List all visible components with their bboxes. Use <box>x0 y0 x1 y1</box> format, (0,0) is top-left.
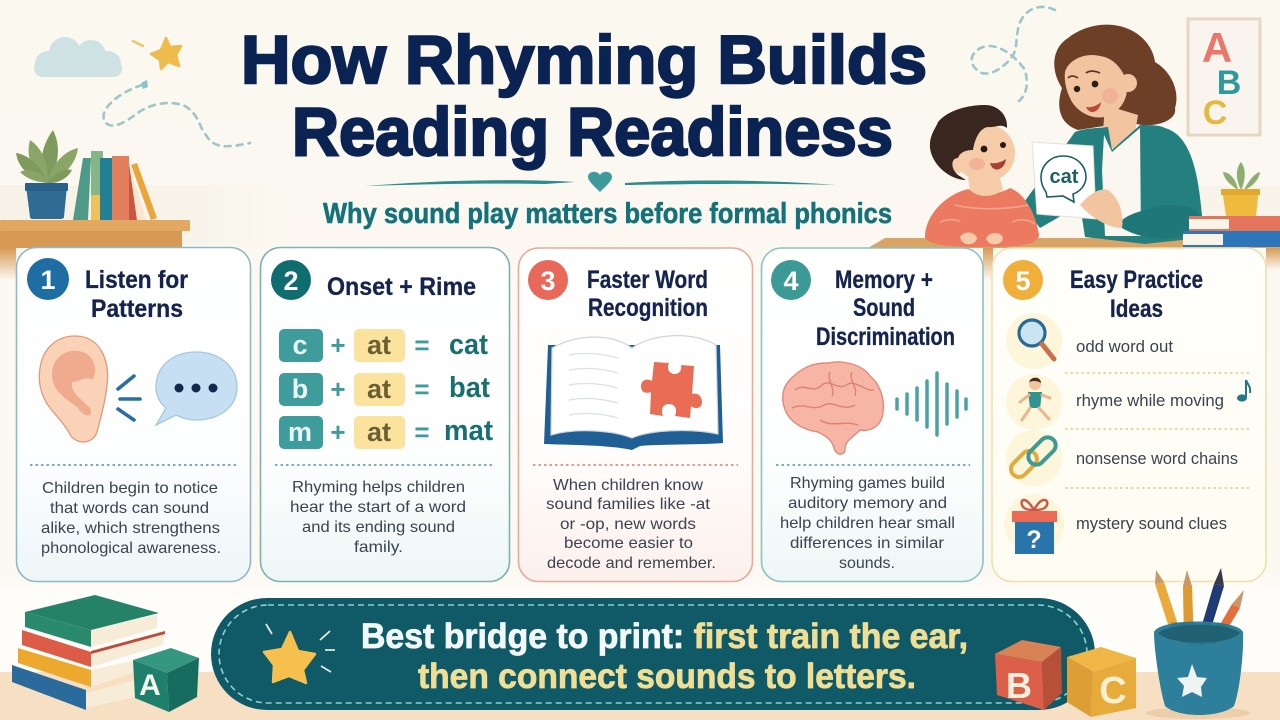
heading: Recognition <box>588 294 708 322</box>
dashed flight path right <box>972 7 1055 101</box>
panel: 5 easy practice ideas <box>992 248 1266 582</box>
teacher <box>1022 25 1202 244</box>
description: Children begin to notice <box>42 480 218 497</box>
face <box>1065 55 1137 118</box>
equation: b + at = bat: bat <box>449 372 490 404</box>
heading: Easy Practice <box>1070 266 1203 294</box>
panel: 4 memory + sound discrimination <box>762 248 983 582</box>
heading <box>1070 266 1203 323</box>
item: rhyme while moving <box>1006 374 1250 430</box>
redraw of pencil bases in cup <box>1170 622 1228 645</box>
teacher hand <box>1080 189 1122 228</box>
heading: Patterns <box>91 295 183 323</box>
equation: b + at = bat: + <box>330 374 346 404</box>
arm <box>1121 205 1201 238</box>
banner message: then connect sounds to letters. <box>418 657 916 696</box>
heading: Listen for <box>85 266 188 294</box>
equation: c + at = cat: c <box>292 330 308 360</box>
icon: ear <box>39 336 108 442</box>
pencil red <box>1208 590 1244 645</box>
letter block B: B <box>1006 665 1032 706</box>
cup star <box>1177 664 1207 697</box>
item: nonsense word chains <box>1006 430 1238 486</box>
letter block C <box>1067 647 1136 717</box>
plant <box>16 130 78 219</box>
description: and its ending sound <box>302 519 455 536</box>
plant and books on table <box>1183 162 1280 247</box>
number badge 2: 2 <box>283 266 299 296</box>
description: When children know <box>553 477 703 494</box>
description: become easier to <box>564 535 693 552</box>
banner <box>211 598 1095 710</box>
ABC wall poster: A <box>1202 24 1232 71</box>
equation: b + at = bat: at <box>367 374 391 404</box>
equation: b + at = bat: b <box>292 374 308 404</box>
description: that words can sound <box>50 500 209 517</box>
boy hands <box>960 233 1003 244</box>
heading: Sound <box>853 294 915 322</box>
item: mystery sound clues: mystery sound clues <box>1076 514 1227 533</box>
number badge 3: 3 <box>540 266 556 296</box>
banner message: Best bridge to print: first train the ear, <box>361 617 968 656</box>
boy hair <box>930 105 1007 180</box>
equation: c + at = cat: at <box>367 330 391 360</box>
letter block A <box>133 648 199 712</box>
icon: speech bubble <box>156 352 237 425</box>
heading <box>85 266 188 323</box>
item: nonsense word chains: nonsense word chains <box>1076 449 1238 468</box>
number badge 4 <box>771 260 811 300</box>
equation: m + at = mat: + <box>330 417 346 447</box>
equation: m + at = mat: mat <box>444 415 493 447</box>
table <box>868 238 1280 280</box>
cardigan <box>1022 125 1202 244</box>
description: help children hear small <box>780 515 955 532</box>
pencil navy <box>1196 568 1224 645</box>
equation: m + at = mat <box>279 415 493 449</box>
item: odd word out <box>1006 313 1173 369</box>
coral book <box>1189 216 1280 231</box>
title: How Rhyming Builds <box>241 22 927 98</box>
item: rhyme while moving: rhyme while moving <box>1076 391 1224 410</box>
books upright <box>73 151 157 220</box>
ABC wall poster: C <box>1203 94 1227 132</box>
heading: Onset + Rime <box>327 273 476 301</box>
neck and head <box>950 124 1015 196</box>
description: hear the start of a word <box>290 499 466 516</box>
item: odd word out: odd word out <box>1076 337 1173 356</box>
item: mystery sound clues: ? <box>1026 526 1042 554</box>
title: Reading Readiness <box>292 94 893 170</box>
description: decode and remember. <box>547 555 716 572</box>
number badge 3 <box>528 260 568 300</box>
icon: music note <box>1237 380 1250 402</box>
icon: puzzle piece <box>641 362 702 418</box>
divider with heart <box>365 172 836 192</box>
cup body <box>1146 622 1250 719</box>
icon: sound wave <box>897 373 966 435</box>
heading <box>587 266 708 322</box>
description: sound families like -at <box>546 496 711 513</box>
description: differences in similar <box>790 535 945 552</box>
banner message <box>361 617 968 696</box>
equation: m + at = mat: at <box>367 417 391 447</box>
flash card cat <box>1032 142 1122 228</box>
title <box>241 22 927 170</box>
shelf <box>0 220 190 280</box>
equation: m + at = mat: = <box>414 417 430 447</box>
hair <box>1054 25 1176 130</box>
equation: b + at = bat: = <box>414 374 430 404</box>
blue book <box>12 665 135 710</box>
number badge 5: 5 <box>1015 266 1031 296</box>
subtitle: Why sound play matters before formal phonics <box>323 198 892 230</box>
shirt <box>1102 128 1141 236</box>
panel: 1 listen for patterns <box>16 248 250 582</box>
blue book <box>1183 231 1280 247</box>
number badge 1 <box>27 258 69 300</box>
panel: 3 faster word recognition <box>518 248 752 582</box>
ABC wall poster: B <box>1217 64 1241 102</box>
yellow book <box>18 648 135 687</box>
equation: c + at = cat <box>279 329 488 362</box>
description <box>41 480 221 557</box>
description: auditory memory and <box>788 495 947 512</box>
description: alike, which strengthens <box>41 520 220 537</box>
pencil cup <box>1146 568 1250 719</box>
green book <box>25 595 159 647</box>
icon: star with rays <box>264 624 335 683</box>
panel: 2 onset + rime <box>260 248 510 582</box>
description <box>290 479 466 556</box>
number badge 5 <box>1003 260 1043 300</box>
description: sounds. <box>839 555 895 572</box>
equation: c + at = cat: + <box>330 330 346 360</box>
star and spark <box>133 38 181 69</box>
neck <box>1103 105 1138 152</box>
equation: m + at = mat: m <box>288 417 312 447</box>
number badge 4: 4 <box>783 266 799 296</box>
item: mystery sound clues <box>1004 494 1227 554</box>
number badge 2 <box>271 260 311 300</box>
heading: Ideas <box>1110 295 1163 323</box>
letter block A: A <box>139 669 161 702</box>
red book <box>22 630 165 667</box>
shelf with plant and books <box>0 130 190 280</box>
pencil yellow <box>1155 570 1184 643</box>
dashed flight path left <box>103 80 250 146</box>
description: phonological awareness. <box>41 540 221 557</box>
ABC wall poster <box>1188 19 1260 135</box>
pencil orange <box>1183 570 1194 645</box>
letter block C: C <box>1099 670 1127 712</box>
number badge 1: 1 <box>40 265 56 295</box>
sweater <box>925 188 1039 247</box>
equation: c + at = cat: = <box>414 330 430 360</box>
boy <box>925 105 1039 247</box>
letter block B <box>995 640 1062 710</box>
heading: Discrimination <box>816 323 955 351</box>
heading: Faster Word <box>587 266 708 294</box>
stack of books bottom left <box>12 595 165 710</box>
description: Rhyming games build <box>790 475 945 492</box>
cloud <box>34 37 122 77</box>
equation: c + at = cat: cat <box>449 329 488 361</box>
icon: sound lines <box>118 376 140 420</box>
icon: brain <box>783 362 883 454</box>
description: Rhyming helps children <box>292 479 465 496</box>
description <box>546 477 716 572</box>
heading: Memory + <box>835 266 933 294</box>
description <box>780 475 955 572</box>
description: or -op, new words <box>560 516 696 533</box>
icon: open book <box>544 336 723 450</box>
heading <box>816 266 955 351</box>
equation: b + at = bat <box>279 372 490 406</box>
description: family. <box>354 539 403 556</box>
flash card cat: cat <box>1050 166 1079 188</box>
